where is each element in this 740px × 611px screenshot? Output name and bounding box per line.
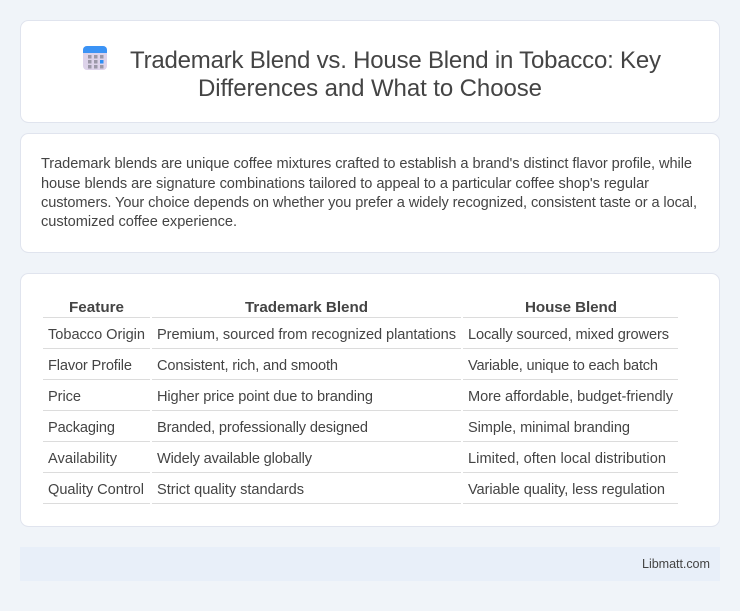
row: price: Price — [48, 389, 81, 405]
panel: title — [20, 20, 720, 122]
panel: introduction — [20, 134, 720, 252]
title text: Differences and What to Choose — [198, 75, 542, 102]
panel: comparison table — [20, 274, 720, 526]
table header: House Blend — [525, 299, 617, 316]
row: packaging: Packaging — [48, 420, 115, 436]
table header: Feature — [69, 299, 124, 316]
title text: Trademark Blend vs. House Blend in Tobacco: Key — [130, 47, 661, 74]
row: availability: Availability — [48, 451, 118, 467]
title text — [130, 47, 661, 102]
row: flavor profile: Variable, unique to each batch — [468, 358, 658, 374]
intro text: Trademark blends are unique coffee mixtures crafted to establish a brand's distinct flavor profile, while — [41, 156, 692, 172]
row: packaging: Branded, professionally designed — [157, 420, 368, 436]
row: flavor profile — [48, 358, 658, 374]
row: tobacco origin: Tobacco Origin — [48, 327, 145, 343]
row: quality control — [48, 482, 665, 498]
row: packaging: Simple, minimal branding — [468, 420, 630, 436]
row: price: Higher price point due to branding — [157, 389, 373, 405]
intro text: customized coffee experience. — [41, 214, 237, 230]
intro text: house blends are signature combinations tailored to appeal to a particular coffee shop's regular — [41, 176, 649, 192]
row: flavor profile: Flavor Profile — [48, 358, 132, 374]
row: quality control: Quality Control — [48, 482, 144, 498]
row: quality control: Variable quality, less regulation — [468, 482, 665, 498]
row: tobacco origin: Locally sourced, mixed growers — [468, 327, 669, 343]
row: availability: Limited, often local distribution — [468, 451, 666, 467]
intro text: customers. Your choice depends on whether you prefer a widely recognized, consistent taste or a local, — [41, 195, 697, 211]
icon: calendar — [83, 46, 107, 70]
row: availability — [48, 451, 666, 467]
intro text — [41, 156, 697, 230]
row: availability: Widely available globally — [157, 451, 313, 467]
row: tobacco origin — [48, 327, 669, 343]
row: flavor profile: Consistent, rich, and smooth — [157, 358, 338, 374]
table header — [69, 299, 617, 316]
row: price — [48, 389, 674, 405]
footer — [20, 547, 720, 581]
row: quality control: Strict quality standards — [157, 482, 304, 498]
table header: Trademark Blend — [245, 299, 368, 316]
row: packaging — [48, 420, 630, 436]
row: price: More affordable, budget-friendly — [468, 389, 674, 405]
footer: Libmatt.com — [642, 557, 710, 571]
row: tobacco origin: Premium, sourced from recognized plantations — [157, 327, 456, 343]
